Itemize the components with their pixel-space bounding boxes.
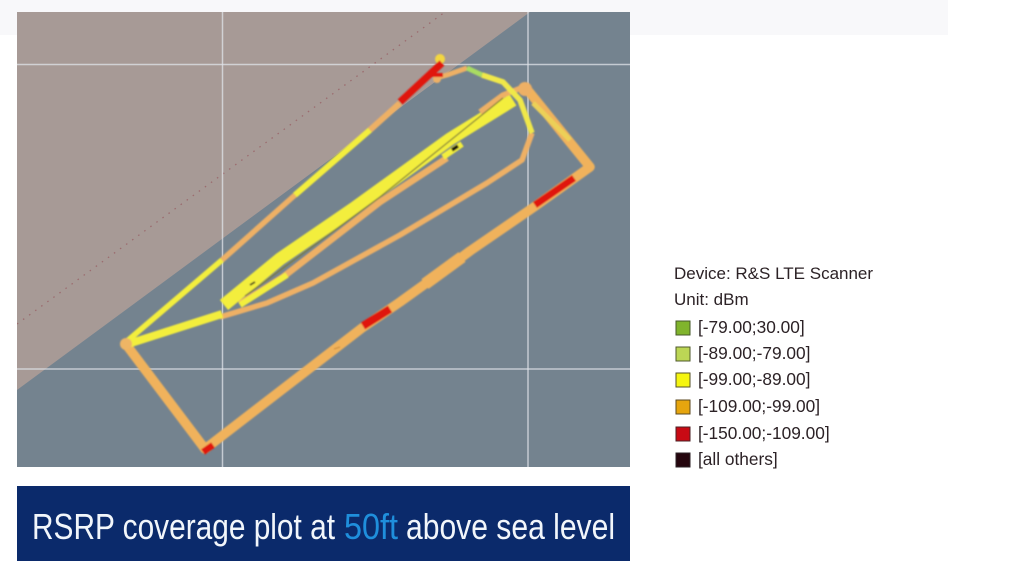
track: outer loop widened section: [425, 257, 462, 284]
caption text: above sea level: [406, 506, 615, 547]
legend item: -89 to -79: [-89.00;-79.00]: [698, 343, 810, 363]
legend item: -79 to 30: [-79.00;30.00]: [698, 317, 805, 337]
track: yellow legs to west corner: [128, 314, 222, 344]
legend item: -150 to -109: [-150.00;-109.00]: [698, 423, 830, 443]
track: top turn: [436, 68, 467, 78]
track: north leg: [222, 195, 295, 260]
track: east corner highlight: [533, 103, 570, 140]
track: dark centre line: [245, 98, 503, 296]
legend item: -109 to -99: [-109.00;-99.00]: [698, 396, 820, 416]
legend heading: unit: Unit: dBm: [674, 290, 749, 309]
track: parallel lower line: [240, 158, 447, 304]
caption banner: [17, 486, 630, 561]
map background: land: [17, 12, 530, 390]
legend item: -99 to -89: [-99.00;-89.00]: [698, 369, 810, 389]
flight track: drive test route: [120, 54, 590, 452]
map background: water: [17, 12, 630, 467]
legend: [674, 264, 873, 469]
node: top orange blob: [433, 75, 441, 83]
track: lower yellow stretches: [240, 275, 287, 305]
node: top tip: [435, 54, 445, 64]
track: inner return, low signal: [220, 133, 532, 317]
track: outer loop, low signal: [125, 88, 590, 449]
track: bundle upper orange end: [480, 86, 526, 112]
node: west corner: [120, 338, 132, 350]
legend item: all others: [all others]: [698, 449, 778, 469]
track: thick yellow bundle: [224, 100, 513, 305]
no data marks: [452, 146, 458, 150]
panel: coverage map: [17, 12, 630, 467]
legend heading: device: Device: R&S LTE Scanner: [674, 264, 873, 283]
caption text: RSRP coverage plot at: [32, 506, 335, 547]
infographic canvas: [17, 12, 873, 561]
caption text: 50ft: [344, 506, 398, 547]
weak signal segments: [203, 63, 574, 452]
node: east turn: [518, 82, 532, 96]
dotted boundary line: [17, 12, 445, 324]
